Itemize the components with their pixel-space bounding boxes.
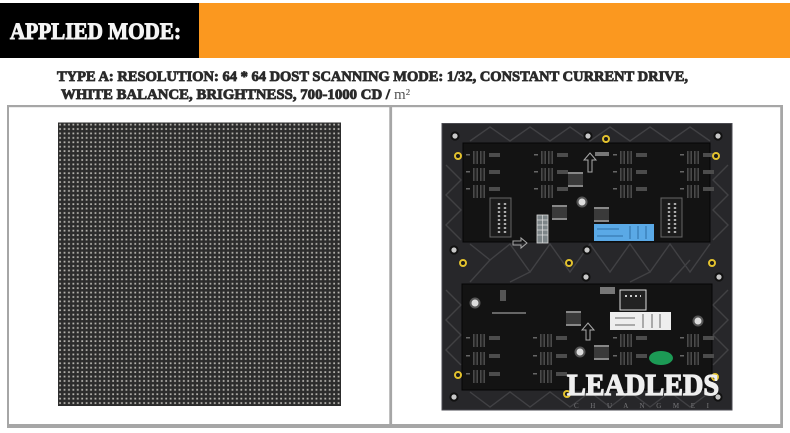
back: frame lattice bbox=[446, 127, 728, 407]
back: white capacitors bbox=[470, 198, 702, 356]
spec line 1: TYPE A: RESOLUTION: 64 * 64 DOST SCANNING MODE: 1/32, CONSTANT CURRENT DRIVE, bbox=[57, 69, 688, 85]
back: direction arrows bbox=[513, 153, 596, 340]
back: brass inserts bbox=[455, 136, 719, 397]
watermark: sub line: C H U A N G M E I bbox=[574, 402, 710, 410]
back: upper driver chips bbox=[466, 151, 714, 222]
back: ribbon connectors bbox=[490, 198, 682, 237]
spec line 2: WHITE BALANCE, BRIGHTNESS, 700-1000 CD / bbox=[61, 87, 391, 103]
heading: applied mode: APPLIED MODE: bbox=[10, 19, 181, 44]
header: orange bar bbox=[199, 3, 790, 58]
back: power connector bbox=[620, 290, 646, 310]
back: upper circuit board bbox=[463, 143, 710, 242]
back: white terminal grid bbox=[537, 215, 548, 243]
back: lower circuit board bbox=[462, 284, 712, 390]
header: black title block bbox=[0, 3, 199, 58]
panel: LED module front bbox=[58, 122, 341, 406]
image frame bbox=[7, 105, 783, 428]
header band bbox=[0, 3, 790, 58]
back: white label bbox=[610, 312, 671, 330]
panel: LED module back bbox=[442, 124, 732, 410]
specification text bbox=[57, 69, 688, 103]
back: lower driver chips bbox=[466, 287, 714, 383]
back: blue label bbox=[594, 224, 654, 241]
back: green sticker bbox=[649, 351, 673, 365]
watermark: leadleds: LEADLEDS bbox=[567, 367, 719, 402]
square metre unit: m² bbox=[394, 87, 411, 103]
back: cabinet frame bbox=[442, 124, 732, 410]
back: grey screws bbox=[450, 132, 723, 401]
